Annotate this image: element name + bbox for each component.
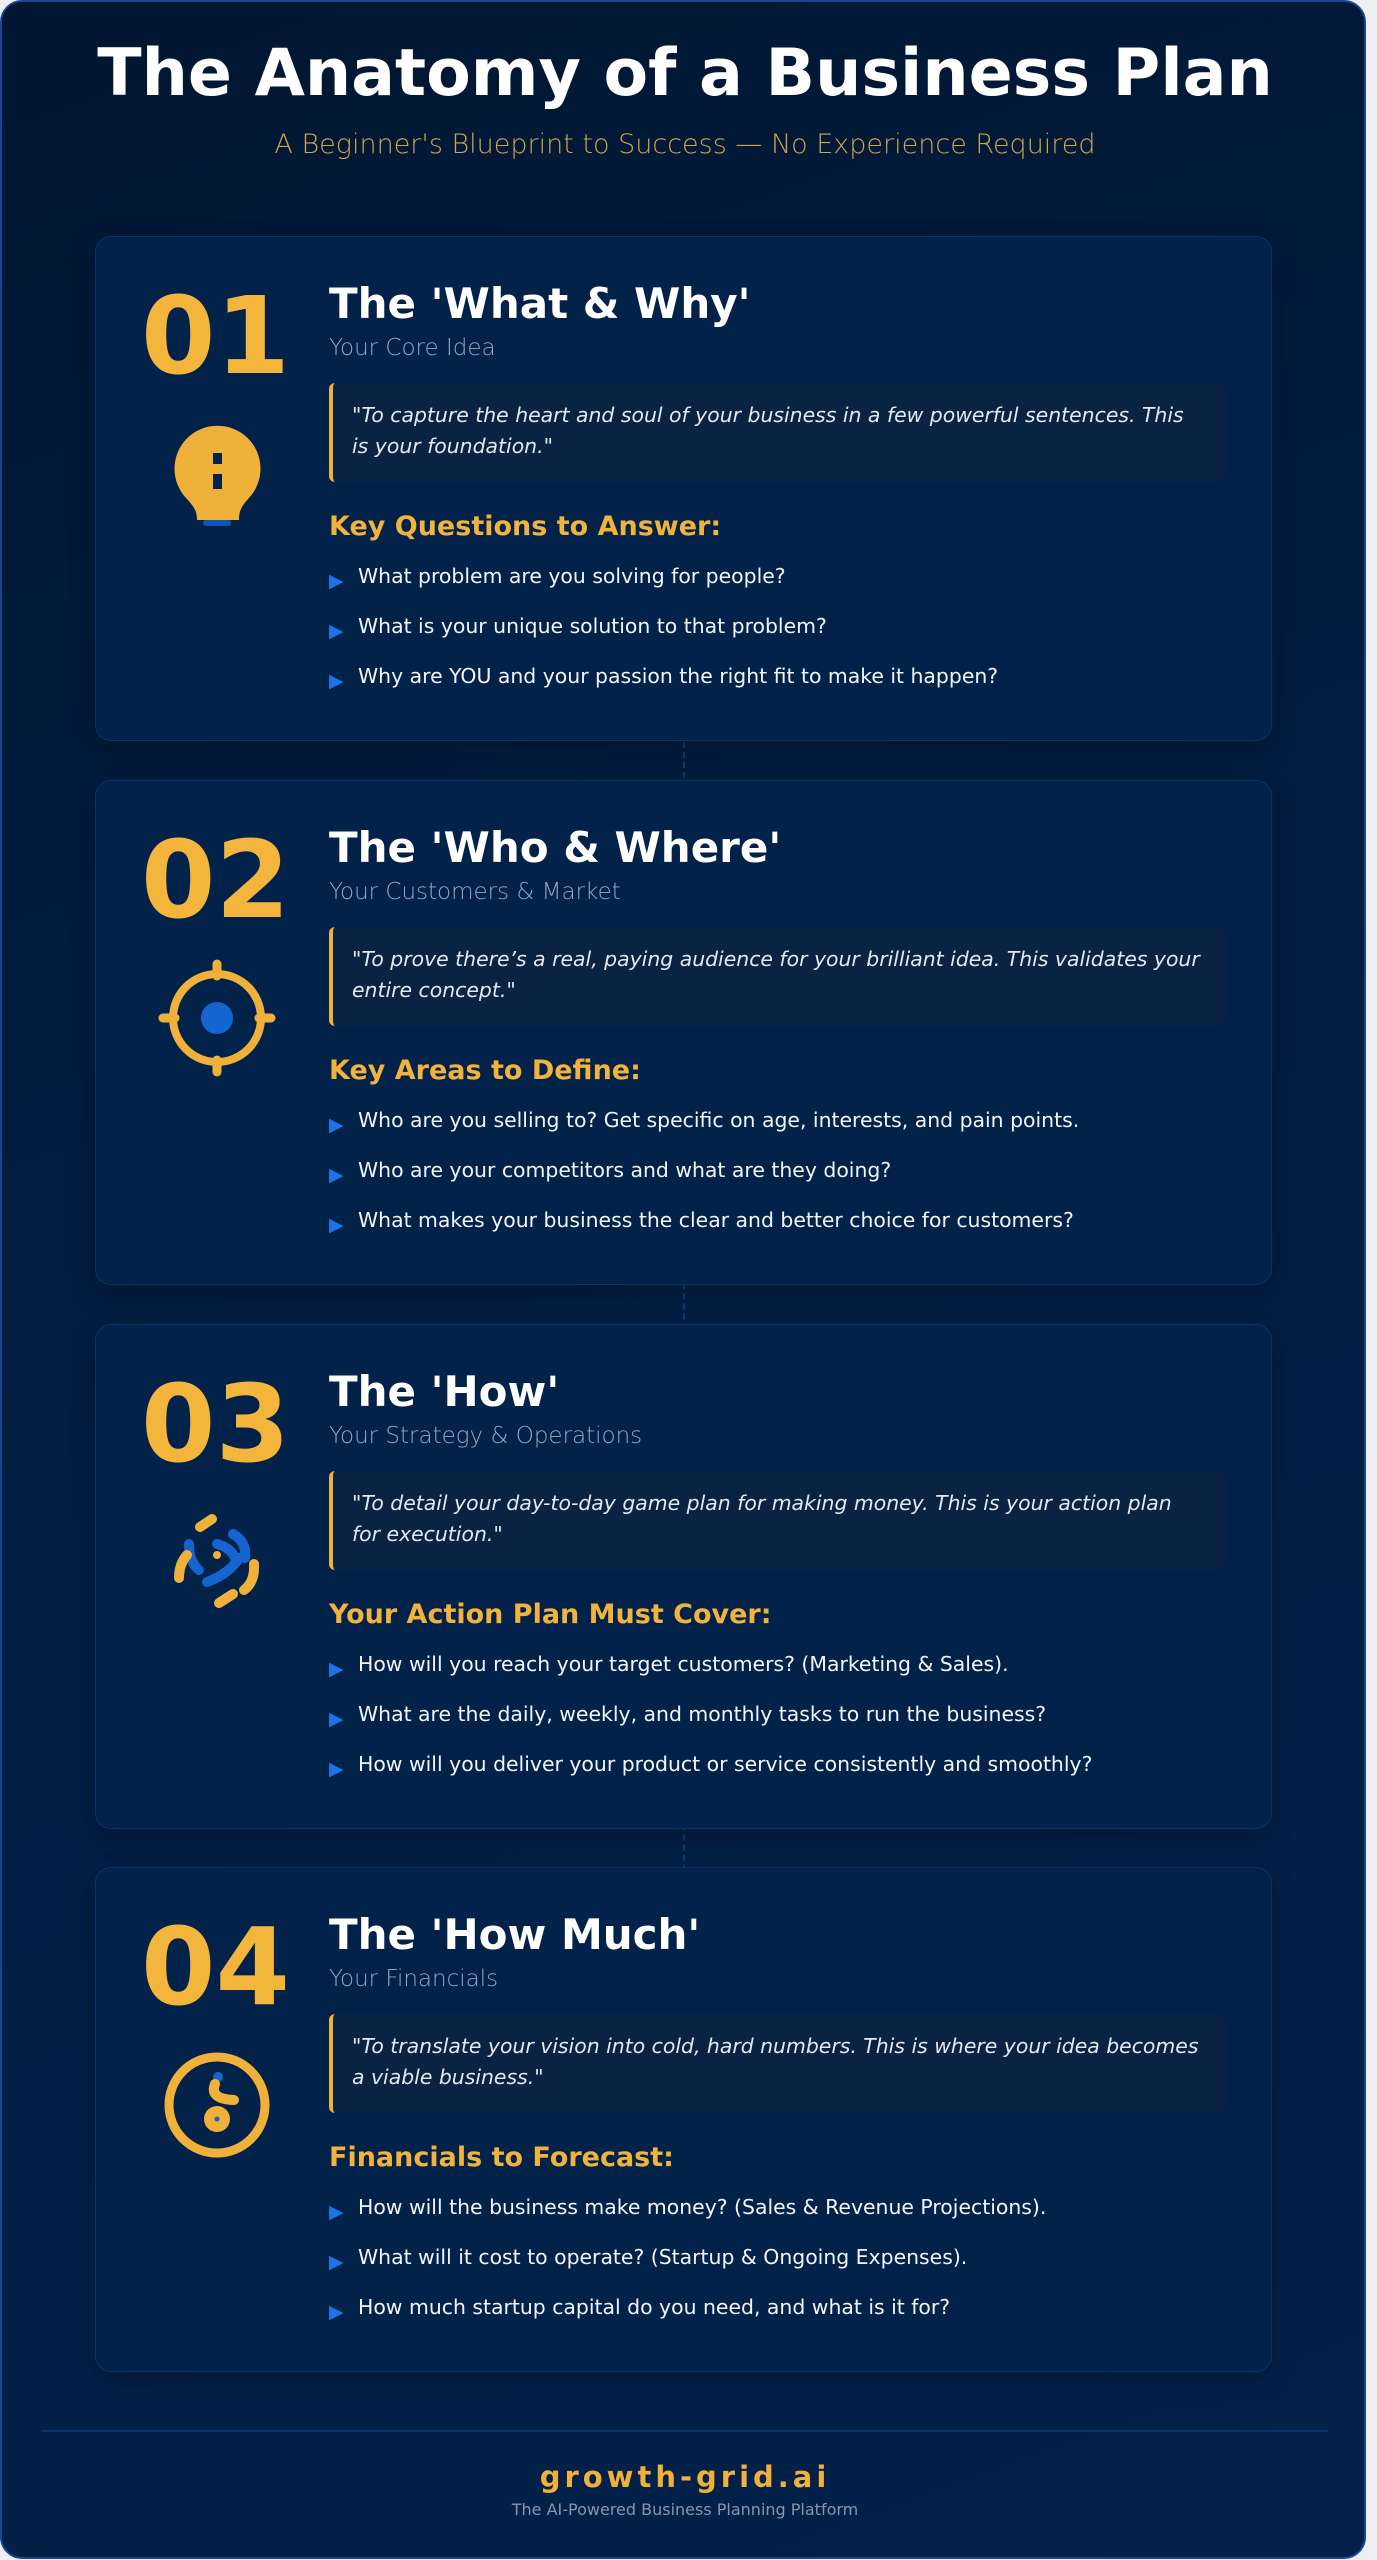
heading: The 'How': [329, 1367, 559, 1416]
subheading: Your Customers & Market: [329, 879, 621, 905]
quote: [329, 1471, 1226, 1570]
icon: lightbulb: [174, 426, 260, 526]
quote: "To capture the heart and soul of your business in a few powerful sentences. This is your foundation.": [352, 403, 1184, 458]
bullet list: What will it cost to operate? (Startup & Ongoing Expenses).: [358, 2245, 967, 2269]
key heading: Financials to Forecast:: [329, 2142, 674, 2173]
bullet list: ▶: [329, 1214, 344, 1236]
heading: The 'What & Why': [329, 279, 750, 328]
bullet list: ▶: [329, 570, 344, 592]
heading: The 'Who & Where': [329, 823, 781, 872]
footer tagline: The AI-Powered Business Planning Platform: [512, 2500, 858, 2519]
bullet list: ▶: [329, 1658, 344, 1680]
quote: "To detail your day-to-day game plan for making money. This is your action plan for execution.": [352, 1491, 1172, 1546]
subtitle: A Beginner's Blueprint to Success — No Experience Required: [274, 129, 1096, 160]
bullet list: [329, 2195, 1046, 2323]
bullet list: ▶: [329, 670, 344, 692]
bullet list: Who are you selling to? Get specific on age, interests, and pain points.: [358, 1108, 1079, 1132]
bullet list: ▶: [329, 620, 344, 642]
bullet list: [329, 1108, 1079, 1236]
key heading: Key Areas to Define:: [329, 1055, 641, 1086]
bullet list: ▶: [329, 1114, 344, 1136]
bullet list: How will you reach your target customers? (Marketing & Sales).: [358, 1652, 1009, 1676]
quote: [329, 2014, 1226, 2113]
subheading: Your Core Idea: [329, 335, 496, 361]
bullet list: What makes your business the clear and better choice for customers?: [358, 1208, 1074, 1232]
bullet list: How will the business make money? (Sales & Revenue Projections).: [358, 2195, 1046, 2219]
bullet list: [329, 564, 998, 692]
quote: "To translate your vision into cold, hard numbers. This is where your idea becomes a viable business.": [352, 2034, 1198, 2089]
quote: "To prove there’s a real, paying audience for your brilliant idea. This validates your entire concept.": [352, 947, 1200, 1002]
icon: strategy: [174, 1514, 260, 1608]
bullet list: What problem are you solving for people?: [358, 564, 786, 588]
bullet list: What is your unique solution to that problem?: [358, 614, 827, 638]
panel: card 03: [95, 1324, 1272, 1829]
bullet list: Why are YOU and your passion the right fit to make it happen?: [358, 664, 998, 688]
bullet list: ▶: [329, 1164, 344, 1186]
bullet list: ▶: [329, 2301, 344, 2323]
number 01: 01: [141, 275, 290, 399]
bullet list: [329, 1652, 1092, 1780]
key heading: Your Action Plan Must Cover:: [329, 1599, 772, 1630]
panel: card 01: [95, 236, 1272, 741]
bullet list: ▶: [329, 1758, 344, 1780]
panel: card 04: [95, 1867, 1272, 2372]
number 02: 02: [141, 819, 290, 943]
title: The Anatomy of a Business Plan: [97, 36, 1273, 111]
quote: [329, 383, 1226, 482]
number 04: 04: [141, 1906, 290, 2030]
subheading: Your Strategy & Operations: [329, 1423, 642, 1449]
bullet list: How will you deliver your product or service consistently and smoothly?: [358, 1752, 1092, 1776]
footer brand: growth-grid.ai: [540, 2460, 830, 2494]
bullet list: ▶: [329, 2201, 344, 2223]
heading: The 'How Much': [329, 1910, 700, 1959]
key heading: Key Questions to Answer:: [329, 511, 721, 542]
bullet list: How much startup capital do you need, and what is it for?: [358, 2295, 950, 2319]
icon: financials: [164, 2052, 270, 2158]
bullet list: What are the daily, weekly, and monthly tasks to run the business?: [358, 1702, 1046, 1726]
subheading: Your Financials: [329, 1966, 498, 1992]
bullet list: ▶: [329, 2251, 344, 2273]
quote: [329, 927, 1226, 1026]
bullet list: ▶: [329, 1708, 344, 1730]
number 03: 03: [141, 1363, 290, 1487]
icon: target: [158, 960, 276, 1076]
bullet list: Who are your competitors and what are they doing?: [358, 1158, 891, 1182]
panel: card 02: [95, 780, 1272, 1285]
